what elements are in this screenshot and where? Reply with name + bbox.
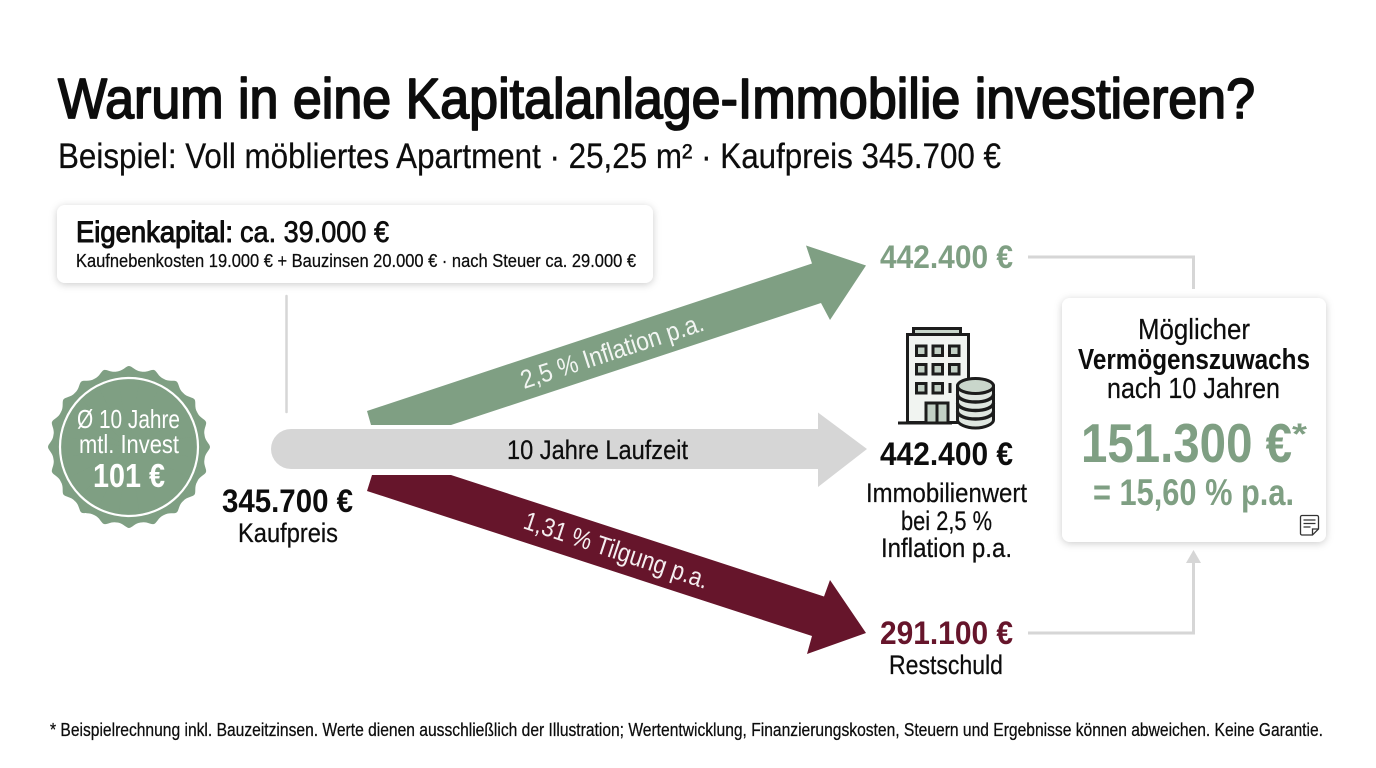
subtitle: Beispiel: Voll möbliertes Apartment · 25,25 m² · Kaufpreis 345.700 € (58, 137, 1001, 176)
badge: monthly invest (48, 366, 210, 528)
result rate: = 15,60 % p.a. (1093, 472, 1294, 513)
value: Immobilienwert: bei 2,5 % (901, 506, 992, 536)
panel: Eigenkapital (57, 205, 653, 283)
connector: top value to result box (1028, 257, 1194, 289)
arrow: inflation (367, 246, 866, 425)
value: Restschuld: 291.100 € (880, 615, 1013, 651)
Eigenkapital heading: Eigenkapital: (76, 216, 233, 249)
result heading: Vermögenszuwachs (1078, 344, 1310, 376)
result heading: nach 10 Jahren (1107, 373, 1280, 405)
value: Restschuld (880, 615, 1013, 680)
connector: Eigenkapital to timeline (285, 296, 288, 412)
result heading: Möglicher (1138, 314, 1250, 346)
result heading (1078, 314, 1310, 405)
arrow: Laufzeit: 10 Jahre Laufzeit (507, 435, 688, 465)
Eigenkapital details: Kaufnebenkosten 19.000 € + Bauzinsen 20.000 € · nach Steuer ca. 29.000 € (76, 250, 637, 271)
result amount: * (1292, 418, 1307, 451)
value: Immobilienwert: Inflation p.a. (881, 533, 1012, 563)
value: Immobilienwert (866, 436, 1027, 563)
value: inflation result: 442.400 € (880, 239, 1013, 275)
icon: note (1300, 516, 1318, 535)
arrow: Tilgung (367, 475, 866, 654)
title: Warum in eine Kapitalanlage-Immobilie investieren? (58, 67, 1255, 131)
Eigenkapital heading (76, 216, 389, 249)
arrow: inflation: 2,5 % Inflation p.a. (517, 307, 708, 395)
Kaufpreis label (222, 483, 353, 548)
icon: building and coins (898, 328, 994, 428)
panel: Vermögenszuwachs (1062, 298, 1326, 542)
arrow: Restschuld to result box (1028, 550, 1201, 633)
result amount: 151.300 € (1081, 412, 1292, 474)
Kaufpreis label: 345.700 € (222, 483, 353, 519)
arrow: Tilgung: 1,31 % Tilgung p.a. (520, 505, 713, 595)
value: Immobilienwert: Immobilienwert (866, 478, 1027, 508)
value: Restschuld: Restschuld (889, 650, 1003, 680)
value: Immobilienwert: 442.400 € (880, 436, 1013, 472)
Eigenkapital heading: ca. 39.000 € (240, 216, 389, 249)
arrow: Laufzeit (271, 412, 867, 487)
badge: monthly invest: Ø 10 Jahre (77, 404, 180, 434)
badge: monthly invest: mtl. Invest (79, 429, 180, 459)
Kaufpreis label: Kaufpreis (238, 518, 338, 548)
badge: monthly invest: 101 € (93, 457, 165, 494)
